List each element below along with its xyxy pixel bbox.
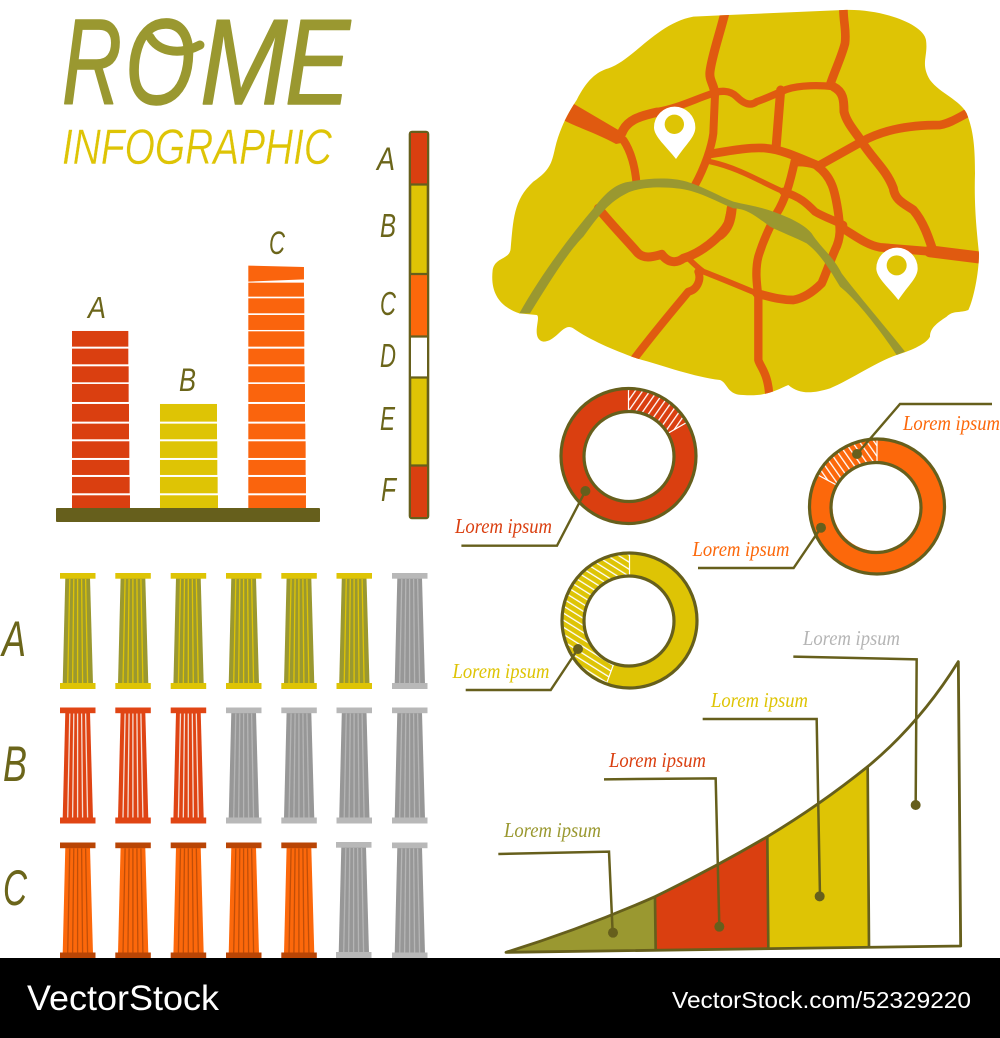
strip label F: F [381,471,397,508]
label: Lorem ipsum [454,514,552,538]
label yellow: Lorem ipsum [710,688,808,712]
bottom leader line [698,528,821,568]
bar label A: A [86,290,106,325]
map land [492,10,979,395]
map of Rome [492,7,983,397]
label red: Lorem ipsum [608,748,706,772]
donut chart: orange [692,404,1000,574]
bar B [160,404,218,509]
bar A [72,331,130,509]
label olive: Lorem ipsum [503,818,601,842]
strip label D: D [380,337,396,374]
yellow area [767,767,869,949]
footer brand: VectorStock [27,979,220,1018]
leader dots [608,800,921,938]
donut chart: red [454,388,696,546]
bar label B: B [179,362,196,398]
river [519,179,905,355]
leader lines [498,657,917,933]
column row C: 5 of 7 filled [60,842,428,958]
label gray: Lorem ipsum [802,626,900,650]
map roads [562,7,983,397]
strip label B: B [380,207,396,244]
strip label A: A [375,141,395,177]
curve outline [506,662,961,952]
bottom dot [816,523,826,533]
leader line [466,649,578,690]
footer band [0,958,1000,1038]
dot [573,644,583,654]
row letter A: A [0,611,26,667]
strip label C: C [380,285,397,322]
area curve chart [498,626,961,952]
top leader line [857,404,992,454]
column row A: 6 of 7 filled [60,573,428,689]
bar chart: A B C stacked bars [56,225,320,522]
row letter C: C [3,860,28,916]
subtitle: INFOGRAPHIC: INFOGRAPHIC [62,119,333,175]
leader line [461,491,585,546]
row letter B: B [3,736,27,792]
bar chart baseline [56,508,320,522]
column row B: 3 of 7 filled [60,708,428,824]
label: Lorem ipsum [452,659,550,683]
stacked vertical strip A–F [375,132,428,518]
bar label C: C [269,225,286,261]
top dot [852,449,862,459]
title: ROME [62,0,351,131]
dot [580,486,590,496]
bar C [248,266,306,509]
olive area [506,897,656,952]
bottom label: Lorem ipsum [692,537,790,561]
red area [655,837,768,950]
icon: map pin right [876,248,918,300]
icon: map pin left [654,107,695,159]
footer url: VectorStock.com/52329220 [672,987,971,1013]
donut chart: yellow [452,553,697,690]
strip label E: E [380,400,396,437]
section dividers [655,767,869,950]
